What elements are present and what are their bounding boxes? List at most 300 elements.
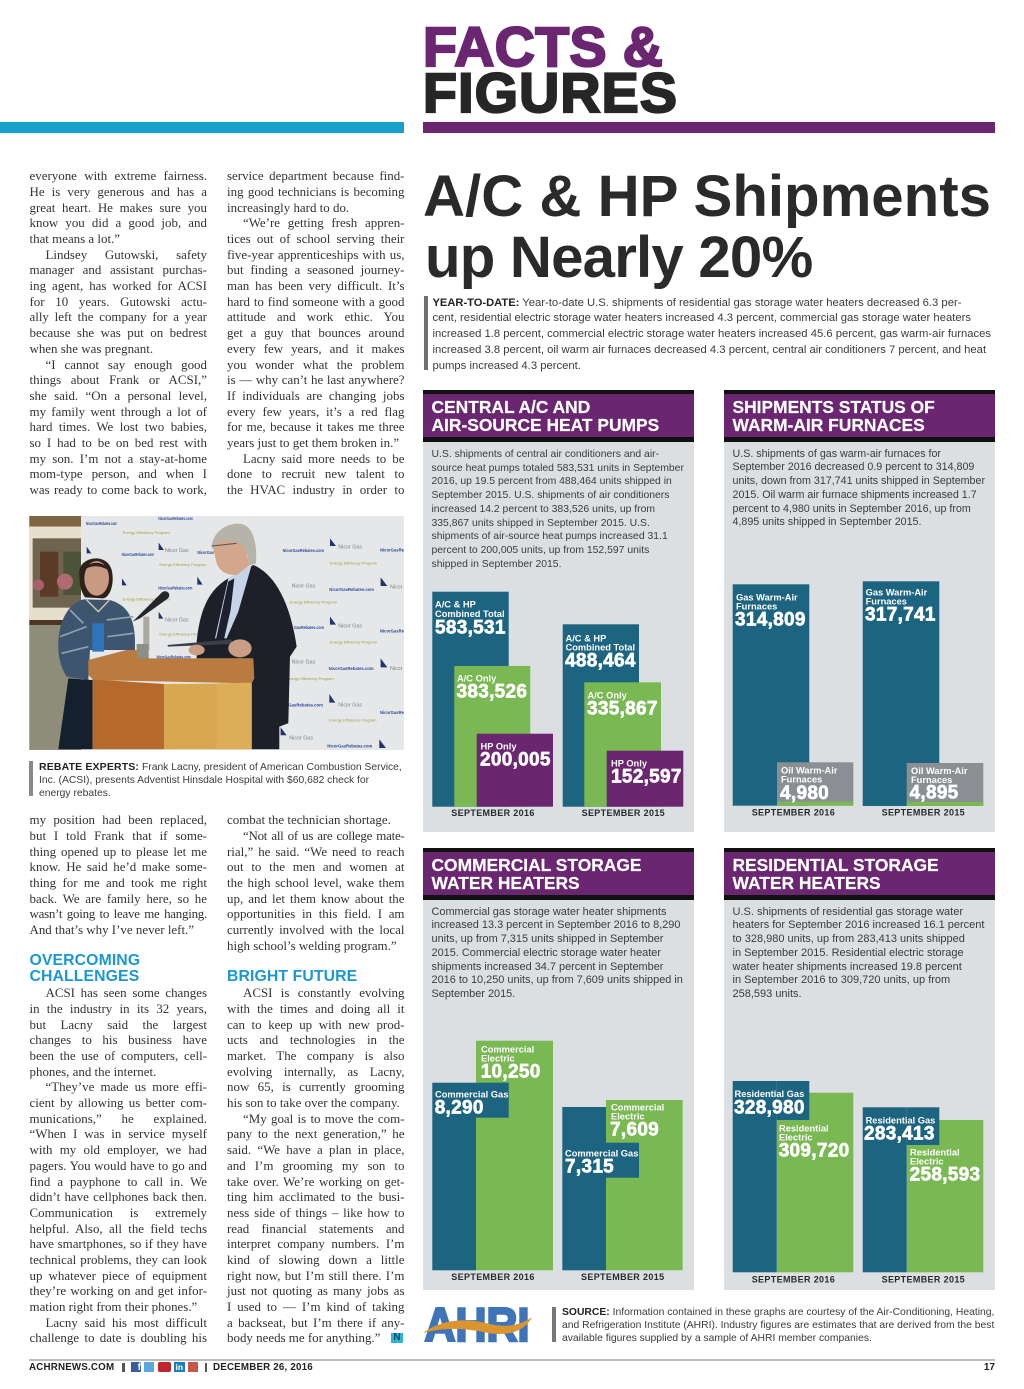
- label: September 2015: SEPTEMBER 2015: [882, 1274, 965, 1284]
- article column 2, bottom: [226, 985, 404, 1345]
- photo: rebate check presentation: Energy Efficiency Program: [123, 530, 170, 535]
- page number: 17: [984, 1362, 995, 1373]
- article column 1, top: mom-type person, and when I: [30, 466, 207, 481]
- article column 1, top: manager and assistant purchas-: [30, 262, 207, 277]
- bar: combined total 2016: A/C & HP: [435, 599, 476, 609]
- article column 1, bottom: but Lacny said the largest: [30, 1017, 207, 1032]
- article column 1, bottom: Lacny said his most difficult: [46, 1315, 207, 1330]
- photo: rebate check presentation: NicorGasRebates.com: [122, 552, 154, 558]
- main headline: A/C & HP Shipments: [423, 164, 991, 229]
- bar: gas furnaces 2015: [863, 581, 939, 806]
- article column 2, top: get a guy that bounces around: [227, 325, 404, 340]
- footer: site, social icons and date: DECEMBER 26, 2016: [213, 1362, 313, 1373]
- source note: SOURCE: Information contained in these graphs are courtesy of the Air-Conditioning, Heating,: [562, 1306, 994, 1318]
- article column 2, middle: out to the men and women at: [227, 859, 404, 874]
- panel heading: warm-air furnaces: WARM-AIR FURNACES: [732, 415, 925, 435]
- bar: HP only 2015: 152,597: [611, 767, 682, 788]
- bar: gas furnaces 2016: [733, 584, 809, 806]
- bar: oil furnaces 2015: [907, 763, 983, 806]
- bar: commercial electric 2015: [606, 1100, 683, 1270]
- photo: rebate check presentation: NicorGasRebates.com: [158, 585, 193, 591]
- bar: oil furnaces 2016: Furnaces: [781, 775, 822, 785]
- bar: commercial gas 2016: Commercial Gas: [435, 1089, 508, 1099]
- panel text: commercial storage: shipments increased 34.7 percent in September: [432, 960, 663, 972]
- photo: rebate check presentation: Nicor Gas: [338, 545, 362, 551]
- photo: rebate check presentation: Energy Efficiency Program: [159, 562, 207, 567]
- photo: rebate check presentation: NicorGasRebates.com: [283, 548, 324, 554]
- icon: Facebook: [131, 1362, 141, 1372]
- panel text: central A/C: [432, 449, 684, 570]
- photo: rebate check presentation: Nicor Gas: [338, 703, 362, 709]
- article column 1, bottom: changes to his business have: [30, 1032, 207, 1047]
- article column 1, middle: thing opened up to please let me: [30, 844, 207, 859]
- article column 2, bottom: read financial statements and: [227, 1221, 404, 1236]
- article column 2, top: every few years, it’s a red flag: [227, 404, 404, 419]
- bar: commercial electric 2015: 7,609: [610, 1120, 659, 1141]
- bar: residential electric 2016: Residential: [779, 1123, 829, 1133]
- article column 2, bottom: pany to the next generation,” he: [227, 1126, 404, 1141]
- panel heading: commercial storage: COMMERCIAL STORAGE: [432, 855, 642, 875]
- bar: commercial gas 2015: 7,315: [565, 1157, 614, 1178]
- article column 2, bottom: ness side of things – like how to: [227, 1205, 404, 1220]
- photo: rebate check presentation: Nicor Gas: [165, 548, 189, 554]
- bar: HP only 2015: HP Only: [611, 758, 648, 768]
- article column 1, middle: but I told Frank that if some-: [30, 828, 207, 843]
- article column 1, middle: thing for me and took me right: [30, 875, 207, 890]
- article column 1, top: everyone with extreme fairness.: [30, 168, 207, 183]
- panel: residential storage water heaters: [724, 895, 994, 1290]
- label: September 2015: SEPTEMBER 2015: [582, 808, 665, 818]
- bar: oil furnaces 2016: 4,980: [780, 783, 829, 804]
- bar: oil furnaces 2016: Oil Warm-Air: [781, 765, 838, 775]
- bar: residential gas 2015: 283,413: [864, 1124, 935, 1145]
- source note: [552, 1306, 994, 1344]
- article column 1, top: was ready to come back to work,: [30, 482, 207, 497]
- bar: commercial gas 2016: [432, 1083, 509, 1270]
- bar: gas furnaces 2015: Furnaces: [866, 597, 907, 607]
- bar chart: central A/C and heat pumps: [432, 592, 684, 818]
- article column 2, bottom: now 65, is currently grooming: [227, 1079, 404, 1094]
- panel text: commercial storage: [432, 906, 683, 1000]
- article column 2, top: “We’re getting fresh appren-: [243, 215, 404, 230]
- bar: HP only 2016: 200,005: [480, 750, 551, 771]
- article column 1, middle: my position had been replaced,: [30, 812, 207, 827]
- article column 1, bottom: helpful. Also, all the field techs: [30, 1221, 207, 1236]
- panel text: central A/C: September 2015. U.S. shipments of air conditioners: [432, 490, 669, 501]
- photo caption: Rebate Experts: REBATE EXPERTS: Frank Lacny, president of American Combustion Service,: [39, 761, 402, 773]
- article column 1, top: because she was put on bedrest: [30, 325, 207, 340]
- photo: rebate check presentation: NicorGasRebates.com: [329, 666, 374, 672]
- bar: oil furnaces 2016: [777, 762, 853, 806]
- panel text: residential storage: 258,593 units.: [732, 988, 802, 1000]
- bar chart: warm-air furnaces: [732, 581, 984, 818]
- bar: commercial gas 2016: 8,290: [435, 1098, 484, 1119]
- article column 2, bottom: ting him acclimated to the busi-: [227, 1189, 404, 1204]
- bar: gas furnaces 2015: 317,741: [865, 605, 936, 626]
- photo: rebate check presentation: GasRebates.com: [294, 625, 324, 631]
- main headline: [423, 164, 991, 290]
- article column 1, bottom: cient by allowing us better com-: [30, 1095, 207, 1110]
- label: September 2016: SEPTEMBER 2016: [451, 808, 535, 818]
- panel heading: central A/C: CENTRAL A/C AND: [432, 397, 590, 417]
- bar: combined total 2015: 488,464: [565, 651, 636, 672]
- footer: site, social icons and date: [29, 1362, 313, 1373]
- photo: rebate check presentation: NicorGasRebates.com: [157, 654, 191, 660]
- bar: gas furnaces 2015: Gas Warm-Air: [866, 587, 928, 597]
- intro: year-to-date summary: cent, residential electric storage water heaters increased 4.3 percent, commercial gas storage water heaters: [432, 312, 971, 324]
- article column 1, top: ally left the company for a year: [30, 309, 207, 324]
- article column 2, bottom: said. “We have a plan in place,: [227, 1142, 404, 1157]
- bar: A/C only 2016: [454, 666, 530, 807]
- article column 2, bottom: a backseat, but I’m there if any-: [227, 1315, 404, 1330]
- article column 1, bottom: “They’ve made us more effi-: [46, 1079, 207, 1094]
- article column 2, bottom: evolving internally, as Lacny,: [227, 1064, 404, 1079]
- article column 1, top: she said. “On a personal level,: [30, 388, 207, 403]
- photo: rebate check presentation: Energy Efficiency Program: [330, 639, 378, 644]
- bar: combined total 2015: A/C & HP: [566, 633, 606, 643]
- bar: commercial electric 2016: Commercial: [481, 1044, 534, 1054]
- subheading: Bright Future: BRIGHT FUTURE: [227, 968, 357, 985]
- article column 1, top: things about Frank or ACSI,”: [30, 372, 207, 387]
- panel text: commercial storage: 2015. Commercial electric storage water heater: [432, 947, 661, 959]
- panel text: commercial storage: increased 13.3 percent in September 2016 to 8,290: [432, 919, 680, 931]
- bar: commercial electric 2016: Electric: [481, 1054, 515, 1064]
- panel text: commercial storage: September 2015.: [432, 988, 515, 1000]
- panel text: warm-air furnaces: 4,895 units shipped in September 2015.: [732, 516, 921, 528]
- bar: residential electric 2015: Residential: [910, 1147, 960, 1157]
- article column 2, bottom: can to keep up with new prod-: [227, 1017, 404, 1032]
- rule: teal section bar: [0, 122, 404, 133]
- photo: rebate check presentation: Energy Efficiency Program: [330, 560, 378, 565]
- article column 2, top: man has been very difficult. It’s: [227, 278, 404, 293]
- panel text: warm-air furnaces: [732, 448, 985, 528]
- article column 1, top: great heart. He makes sure you: [30, 200, 207, 215]
- bar: residential electric 2016: 309,720: [779, 1141, 849, 1162]
- panel text: commercial storage: units, up from 7,315 units shipped in September: [432, 933, 663, 945]
- article column 2, bottom: ucts and technologies in the: [227, 1032, 404, 1047]
- article column 1, top: that means a lot.”: [30, 231, 120, 246]
- photo: rebate check presentation: Energy Efficiency Program: [123, 597, 170, 602]
- bar: residential gas 2016: 328,980: [734, 1097, 805, 1118]
- masthead: Facts & Figures: [423, 16, 678, 124]
- article column 1, bottom: [30, 985, 207, 1345]
- panel text: residential storage: U.S. shipments of residential gas storage water: [732, 906, 963, 918]
- bar: A/C only 2015: A/C Only: [588, 690, 628, 700]
- bar: oil furnaces 2015: Furnaces: [911, 775, 952, 785]
- panel text: central A/C: 2016, up 19.5 percent from 488,464 units shipped in: [432, 476, 672, 487]
- panel heading: residential storage: RESIDENTIAL STORAGE: [732, 855, 939, 875]
- bar: commercial electric 2016: [476, 1041, 553, 1270]
- article column 2, top: hard to find someone with a good: [227, 294, 404, 309]
- article column 1, top: so I had to be on bed rest with: [30, 435, 207, 450]
- panel text: central A/C: source heat pumps totaled 583,531 units in September: [432, 463, 684, 474]
- panel text: warm-air furnaces: percent to 4,980 units in September 2016, up from: [732, 502, 971, 514]
- bar: residential electric 2016: Electric: [779, 1133, 813, 1143]
- article column 1, bottom: up whatever piece of equipment: [30, 1268, 207, 1283]
- article column 1, bottom: challenge to date is doubling his: [30, 1330, 207, 1345]
- main headline: up Nearly 20%: [425, 225, 812, 290]
- article column 1, top: [30, 168, 207, 497]
- bar: commercial gas 2015: Commercial Gas: [565, 1148, 638, 1158]
- photo: rebate check presentation: NicorGasRebates.com: [86, 521, 117, 527]
- panel: warm-air furnaces: [724, 437, 994, 832]
- article column 2, middle: rial,” he said. “We need to reach: [227, 844, 404, 859]
- article column 2, top: increasingly hard to do.: [227, 200, 349, 215]
- label: September 2016: SEPTEMBER 2016: [752, 808, 835, 818]
- icon: Twitter: [144, 1362, 154, 1372]
- panel heading: residential storage: [724, 848, 994, 900]
- article column 2, top: service department because find-: [227, 168, 404, 183]
- panel text: central A/C: percent to 200,005 units, up from 152,597 units: [432, 545, 649, 556]
- article column 2, top: attitude and work ethic. You: [227, 309, 404, 324]
- article column 2, bottom: body needs me for anything.”: [227, 1330, 380, 1345]
- photo: rebate check presentation: Nicor: [390, 666, 403, 672]
- article column 1, top: hard times. We lost two babies,: [30, 419, 207, 434]
- article column 1, bottom: pagers. You would have to go and: [30, 1158, 207, 1173]
- article column 2, top: is — why can’t he last anywhere?: [227, 372, 404, 387]
- panel heading: residential storage: WATER HEATERS: [732, 873, 881, 893]
- label: September 2016: SEPTEMBER 2016: [752, 1274, 835, 1284]
- bar: A/C only 2015: [584, 682, 661, 807]
- bar: commercial gas 2015: [562, 1107, 639, 1270]
- article column 2, bottom: take over. We’re working on get-: [227, 1174, 404, 1189]
- panel heading: warm-air furnaces: SHIPMENTS STATUS OF: [732, 397, 935, 417]
- article column 1, bottom: phones, and the internet.: [30, 1064, 156, 1079]
- article column 1, bottom: with my old employer, we had: [30, 1142, 207, 1157]
- panel heading: central A/C: [423, 390, 694, 442]
- photo: rebate check presentation: Energy Efficiency Program: [287, 676, 334, 681]
- photo: rebate check presentation: [29, 516, 404, 750]
- panel text: residential storage: to 328,980 units, up from 283,413 units shipped: [732, 933, 965, 945]
- bar: residential gas 2015: Residential Gas: [866, 1115, 935, 1125]
- intro: year-to-date summary: pumps increased 4.3 percent.: [432, 360, 581, 372]
- article column 1, top: for 10 years. Gutowski actu-: [30, 294, 207, 309]
- bar: residential electric 2016: [777, 1093, 853, 1272]
- photo: rebate check presentation: Nicor Gas: [165, 617, 189, 623]
- bar: combined total 2016: [432, 592, 509, 807]
- article column 2, top: you wonder what the problem: [227, 357, 404, 372]
- photo: rebate check presentation: Nicor Gas: [289, 735, 313, 741]
- bar: gas furnaces 2016: Furnaces: [736, 602, 777, 612]
- article column 1, bottom: didn’t have cellphones back then.: [30, 1189, 207, 1204]
- article column 1, middle: wasn’t going to leave me hanging.: [30, 906, 207, 921]
- label: September 2016: SEPTEMBER 2016: [451, 1272, 535, 1282]
- bar: residential electric 2015: 258,593: [910, 1165, 980, 1186]
- panel heading: commercial storage: WATER HEATERS: [432, 873, 580, 893]
- article column 1, bottom: munications,” he explained.: [30, 1111, 207, 1126]
- article column 1, bottom: find a payphone to call in. We: [30, 1174, 207, 1189]
- bar: HP only 2016: [477, 734, 553, 807]
- bar: residential electric 2015: [907, 1120, 983, 1272]
- panel text: central A/C: shipments of air-source heat pumps increased 31.1: [432, 531, 668, 542]
- article column 2, top: for me, because it takes me three: [227, 419, 404, 434]
- article column 2, top: If individuals are changing jobs: [227, 388, 404, 403]
- article column 1, bottom: in the industry in its 32 years,: [30, 1001, 207, 1016]
- article column 2, bottom: “My goal is to move the com-: [243, 1111, 404, 1126]
- article column 2, top: five-year apprenticeships with us,: [227, 247, 404, 262]
- article column 1, middle: back. We are family here, so he: [30, 891, 207, 906]
- bar: combined total 2016: 583,531: [435, 618, 506, 639]
- article column 2, middle: combat the technician shortage.: [227, 812, 391, 827]
- article column 1, bottom: ACSI has seen some changes: [46, 985, 207, 1000]
- photo: rebate check presentation: Nicor Gas: [292, 584, 316, 590]
- panel text: residential storage: heaters for September 2016 increased 16.1 percent: [732, 919, 984, 931]
- panel heading: commercial storage: [423, 848, 694, 900]
- article column 1, middle: And that’s why I’ve never left.”: [30, 922, 194, 937]
- masthead: Facts & Figures: FIGURES: [423, 62, 678, 124]
- label: September 2015: SEPTEMBER 2015: [882, 808, 965, 818]
- panel text: warm-air furnaces: 2015. Oil warm air furnace shipments increased 1.7: [732, 489, 977, 501]
- photo: rebate check presentation: NicorGasRebates.com: [329, 587, 374, 593]
- panel text: central A/C: increased 14.2 percent to 383,526 units, up from: [432, 504, 655, 515]
- bar chart: residential storage: [732, 1081, 984, 1284]
- bar: oil furnaces 2015: 4,895: [910, 783, 959, 804]
- bar: combined total 2016: Combined Total: [435, 609, 505, 619]
- photo: rebate check presentation: Nicor Gas: [292, 659, 316, 665]
- bar: gas furnaces 2016: 314,809: [735, 610, 806, 631]
- article column 1, bottom: “When I was in service myself: [30, 1126, 207, 1141]
- bar: combined total 2015: [563, 624, 639, 807]
- article column 2, middle: up, and let them know about the: [227, 891, 404, 906]
- article column 1, top: ing agent, has worked for ACSI: [30, 278, 207, 293]
- icon: Google Plus: [188, 1362, 198, 1372]
- bar: A/C only 2016: 383,526: [456, 682, 527, 703]
- footer: site, social icons and date: ACHRNEWS.COM: [29, 1362, 114, 1373]
- icon: Facebook: f: [138, 1362, 141, 1373]
- photo caption: Rebate Experts: energy rebates.: [39, 788, 111, 799]
- bar: residential gas 2015: [863, 1107, 939, 1272]
- photo: rebate check presentation: Energy Efficiency Program: [329, 718, 377, 723]
- bar: A/C only 2016: A/C Only: [457, 673, 497, 683]
- icon: YouTube: [158, 1362, 171, 1372]
- article column 1, top: when she was pregnant.: [30, 341, 153, 356]
- source note: and Refrigeration Institute (AHRI). Industry figures are estimates that are derived from the best: [562, 1320, 994, 1330]
- panel: commercial storage water heaters: [423, 895, 694, 1290]
- panel text: central A/C: U.S. shipments of central air conditioners and air-: [432, 449, 659, 460]
- article column 2, top: the HVAC industry in order to: [227, 482, 404, 497]
- article column 2, top: ing good technicians is becoming: [227, 184, 404, 199]
- article column 1, top: know you did a good job, and: [30, 215, 207, 230]
- article column 2, top: Lacny said more needs to be: [243, 451, 404, 466]
- article column 2, top: but finding a seasoned journey-: [227, 262, 404, 277]
- panel text: residential storage: in September 2015. Residential electric storage: [732, 947, 964, 959]
- panel text: residential storage: water heater shipments increased 19.8 percent: [732, 960, 962, 972]
- article column 2, bottom: ACSI is constantly evolving: [243, 985, 404, 1000]
- bar: oil furnaces 2015: Oil Warm-Air: [911, 766, 968, 776]
- photo: rebate check presentation: NicorGasRebates.com: [158, 516, 193, 522]
- article column 2, middle: high school’s welding program.”: [227, 938, 397, 953]
- article column 2, bottom: his son to take over the company.: [227, 1095, 400, 1110]
- photo: rebate check presentation: Nicor Gas: [338, 624, 362, 630]
- rule: purple section bar: [423, 122, 995, 133]
- photo caption: Rebate Experts: Inc. (ACSI), presents Adventist Hinsdale Hospital with $60,682 check for: [39, 775, 369, 786]
- bar: combined total 2015: Combined Total: [566, 643, 635, 653]
- article column 2, bottom: with the times and doing all it: [227, 1001, 404, 1016]
- article column 2, bottom: right now, but I’m still there. I’m: [227, 1268, 404, 1283]
- article column 2, bottom: and I’m grooming my son to: [227, 1158, 404, 1173]
- subheading: Overcoming Challenges: [30, 952, 140, 985]
- photo: rebate check presentation: NicorGasRebates.com: [327, 743, 373, 749]
- article column 2, top: [227, 168, 404, 497]
- intro: year-to-date summary: [424, 296, 991, 372]
- article column 2, middle: [227, 812, 404, 953]
- article column 2, bottom: market. The company is also: [227, 1048, 404, 1063]
- article column 1, bottom: mation right from their phones.”: [30, 1299, 197, 1314]
- panel text: warm-air furnaces: units, down from 317,741 units shipped in September: [732, 475, 985, 487]
- bar: residential gas 2016: Residential Gas: [734, 1089, 804, 1099]
- panel text: residential storage: [732, 906, 984, 1000]
- article column 1, top: my family went through a lot of: [30, 404, 207, 419]
- article column 2, bottom: kind of slowing down a little: [227, 1252, 404, 1267]
- bar: commercial electric 2015: Commercial: [611, 1102, 664, 1112]
- article column 2, middle: the high school level, wake them: [227, 875, 404, 890]
- photo: rebate check presentation: Energy Efficiency Program: [159, 631, 207, 636]
- bar: HP only 2015: [607, 751, 683, 807]
- panel heading: warm-air furnaces: [724, 390, 994, 442]
- subheading: Overcoming Challenges: OVERCOMING: [30, 952, 140, 969]
- source note: available figures supplied by a sample of AHRI member companies.: [562, 1332, 872, 1344]
- article column 1, bottom: they’re working on and get infor-: [30, 1283, 207, 1298]
- article column 2, bottom: interpret company numbers. I’m: [227, 1236, 404, 1251]
- article column 2, top: every few years, and it makes: [227, 341, 404, 356]
- end mark icon: N: [393, 1332, 401, 1343]
- intro: year-to-date summary: increased 1.8 percent, commercial electric storage water heaters increased 45.6 percent, gas warm-air furnaces: [432, 328, 991, 340]
- bar: gas furnaces 2016: Gas Warm-Air: [736, 592, 798, 602]
- bar: commercial electric 2015: Electric: [611, 1112, 645, 1122]
- intro: year-to-date summary: increased 3.8 percent, oil warm air furnaces decreased 4.3 percent, central air conditioners 7 percent, and heat: [432, 344, 986, 356]
- photo: rebate check presentation: GasRebates.com: [288, 703, 323, 709]
- bar: residential gas 2016: [733, 1081, 809, 1272]
- end mark icon: [391, 1333, 403, 1343]
- panel text: warm-air furnaces: September 2016 decreased 0.9 percent to 314,809: [732, 461, 974, 473]
- panel text: commercial storage: Commercial gas storage water heater shipments: [432, 906, 666, 918]
- article column 1, top: He is very generous and has a: [30, 184, 207, 199]
- panel heading: central A/C: AIR-SOURCE HEAT PUMPS: [432, 415, 659, 435]
- photo: rebate check presentation: Nicor: [390, 585, 403, 591]
- panel text: central A/C: 335,867 units shipped in September 2015. U.S.: [432, 518, 650, 529]
- article column 1, bottom: technical problems, they can look: [30, 1252, 207, 1267]
- article column 1, bottom: Communication is extremely: [30, 1205, 207, 1220]
- article column 2, top: tices out of school serving their: [227, 231, 404, 246]
- article column 2, top: done to recruit new talent to: [227, 466, 404, 481]
- subheading: Overcoming Challenges: CHALLENGES: [30, 968, 139, 985]
- article column 1, middle: [30, 812, 207, 937]
- photo: rebate check presentation: Energy Efficiency Program: [290, 599, 338, 604]
- rule: footer line: [29, 1359, 995, 1361]
- bar chart: commercial storage: [432, 1040, 683, 1282]
- article column 2, bottom: just not quoting as many jobs as: [227, 1283, 404, 1298]
- bar: commercial electric 2016: 10,250: [481, 1062, 541, 1083]
- photo: rebate check presentation: NicorGas: [197, 550, 214, 556]
- article column 2, bottom: I used to — I’m kind of taking: [227, 1299, 404, 1314]
- masthead: Facts & Figures: FACTS &: [423, 16, 663, 78]
- article column 1, bottom: been the use of computers, cell-: [30, 1048, 207, 1063]
- panel text: commercial storage: 2016 to 10,250 units, up from 7,609 units shipped in: [432, 974, 683, 986]
- panel text: warm-air furnaces: U.S. shipments of gas warm-air furnaces for: [732, 448, 941, 460]
- bar: residential electric 2015: Electric: [910, 1157, 944, 1167]
- panel text: central A/C: shipped in September 2015.: [432, 559, 561, 570]
- article column 1, middle: know. He said he’d make some-: [30, 859, 207, 874]
- panel text: residential storage: in September 2016 to 309,720 units, up from: [732, 974, 950, 986]
- article column 2, middle: opportunities in this field. I am: [227, 906, 404, 921]
- panel: central A/C and heat pumps: [423, 437, 694, 832]
- article column 1, bottom: have smartphones, so if they have: [30, 1236, 207, 1251]
- article column 2, middle: “Not all of us are college mate-: [243, 828, 404, 843]
- bar: HP only 2016: HP Only: [480, 741, 517, 751]
- article column 2, top: years just to get them broken in.”: [227, 435, 399, 450]
- photo caption: Rebate Experts: [29, 761, 402, 799]
- bar: A/C only 2015: 335,867: [587, 699, 658, 720]
